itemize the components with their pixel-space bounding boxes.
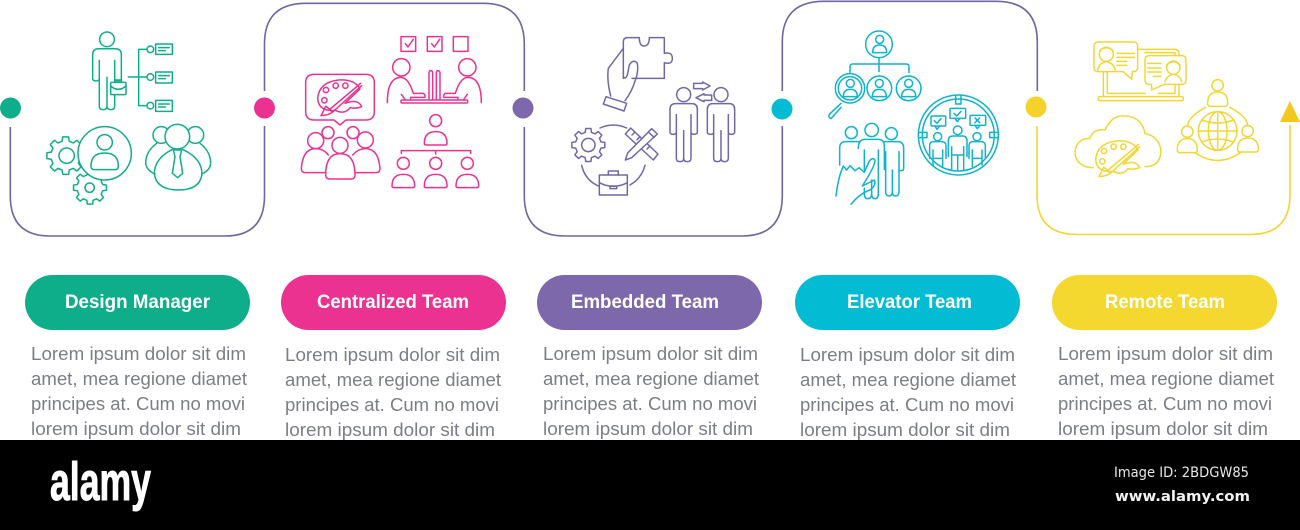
text block: design manager: Lorem ipsum dolor sit dim xyxy=(31,343,246,364)
text block: centralized team: lorem ipsum dolor sit dim xyxy=(285,419,495,440)
text block: embedded team xyxy=(543,343,759,439)
icons: embedded team xyxy=(572,38,735,195)
pill: Embedded Team xyxy=(537,275,762,330)
icon: three people and pointing hand xyxy=(836,123,904,204)
pill: Elevator Team xyxy=(795,275,1020,330)
text block: centralized team: principes at. Cum no movi xyxy=(285,394,499,415)
text block: remote team: Lorem ipsum dolor sit dim xyxy=(1058,343,1273,364)
text block: elevator team: Lorem ipsum dolor sit dim xyxy=(800,344,1015,365)
text block: design manager: amet, mea regione diamet xyxy=(31,368,247,389)
text block: design manager: lorem ipsum dolor sit dim xyxy=(31,418,241,439)
icons: design manager xyxy=(47,32,211,204)
icon: gears and user xyxy=(47,127,131,204)
icon: manager with briefcase xyxy=(93,32,172,111)
icon: gear, tools and briefcase cycle xyxy=(572,125,658,195)
icon: two people at laptops xyxy=(387,59,481,103)
text block: embedded team: lorem ipsum dolor sit dim xyxy=(543,418,753,439)
pill: Design Manager xyxy=(25,275,250,330)
text block: embedded team: Lorem ipsum dolor sit dim xyxy=(543,343,758,364)
icon: people in a circle with feedback xyxy=(918,95,998,175)
step dot: purple xyxy=(512,98,534,118)
text block: elevator team xyxy=(800,344,1016,440)
text block: centralized team xyxy=(285,344,501,440)
icon: checkboxes xyxy=(401,37,468,51)
text block: design manager xyxy=(31,343,247,439)
icon: palette speech bubble xyxy=(306,74,374,125)
text block: elevator team: principes at. Cum no movi xyxy=(800,394,1014,415)
icon: hand holding puzzle piece xyxy=(603,38,672,111)
step dot: green xyxy=(0,98,21,118)
icons: centralized team xyxy=(301,37,481,188)
text block: remote team xyxy=(1058,343,1274,439)
text block: design manager: principes at. Cum no movi xyxy=(31,393,245,414)
text block: elevator team: amet, mea regione diamet xyxy=(800,369,1016,390)
icon: org chart with magnifier xyxy=(829,31,921,119)
connecting frame path xyxy=(10,1,1290,236)
text block: centralized team: amet, mea regione diamet xyxy=(285,369,501,390)
alamy logo: alamy xyxy=(50,452,151,512)
icons: elevator team xyxy=(829,31,998,204)
icon: global team xyxy=(1177,80,1258,160)
text block: embedded team: amet, mea regione diamet xyxy=(543,368,759,389)
icon: team with tie xyxy=(146,124,211,190)
icon: laptop video chat xyxy=(1094,42,1186,101)
text block: elevator team: lorem ipsum dolor sit dim xyxy=(800,419,1010,440)
pill: Centralized Team: Centralized Team xyxy=(317,292,469,313)
image id: Image ID: 2BDGW85 xyxy=(1114,465,1249,481)
website: www.alamy.com xyxy=(1115,489,1250,505)
arrow head xyxy=(1280,101,1300,122)
text block: remote team: principes at. Cum no movi xyxy=(1058,393,1272,414)
pill: Embedded Team: Embedded Team xyxy=(571,292,719,313)
text block: centralized team: Lorem ipsum dolor sit dim xyxy=(285,344,500,365)
icons: remote team xyxy=(1075,42,1258,177)
icon: cloud with palette xyxy=(1075,116,1161,177)
icon: org chart xyxy=(392,115,479,188)
step dot: pink xyxy=(254,98,275,118)
icon: group of people xyxy=(301,127,380,179)
step dot: yellow xyxy=(1026,96,1046,118)
text block: remote team: amet, mea regione diamet xyxy=(1058,368,1274,389)
icon: two people exchanging xyxy=(670,82,735,162)
pill: Remote Team xyxy=(1052,275,1277,330)
pill: Remote Team: Remote Team xyxy=(1105,292,1225,313)
text block: remote team: lorem ipsum dolor sit dim xyxy=(1058,418,1268,439)
text block: embedded team: principes at. Cum no movi xyxy=(543,393,757,414)
pill: Elevator Team: Elevator Team xyxy=(847,292,972,313)
watermark bar xyxy=(0,440,1300,530)
step dot: cyan xyxy=(772,98,792,120)
pill: Design Manager: Design Manager xyxy=(65,292,211,313)
pill: Centralized Team xyxy=(281,275,506,330)
